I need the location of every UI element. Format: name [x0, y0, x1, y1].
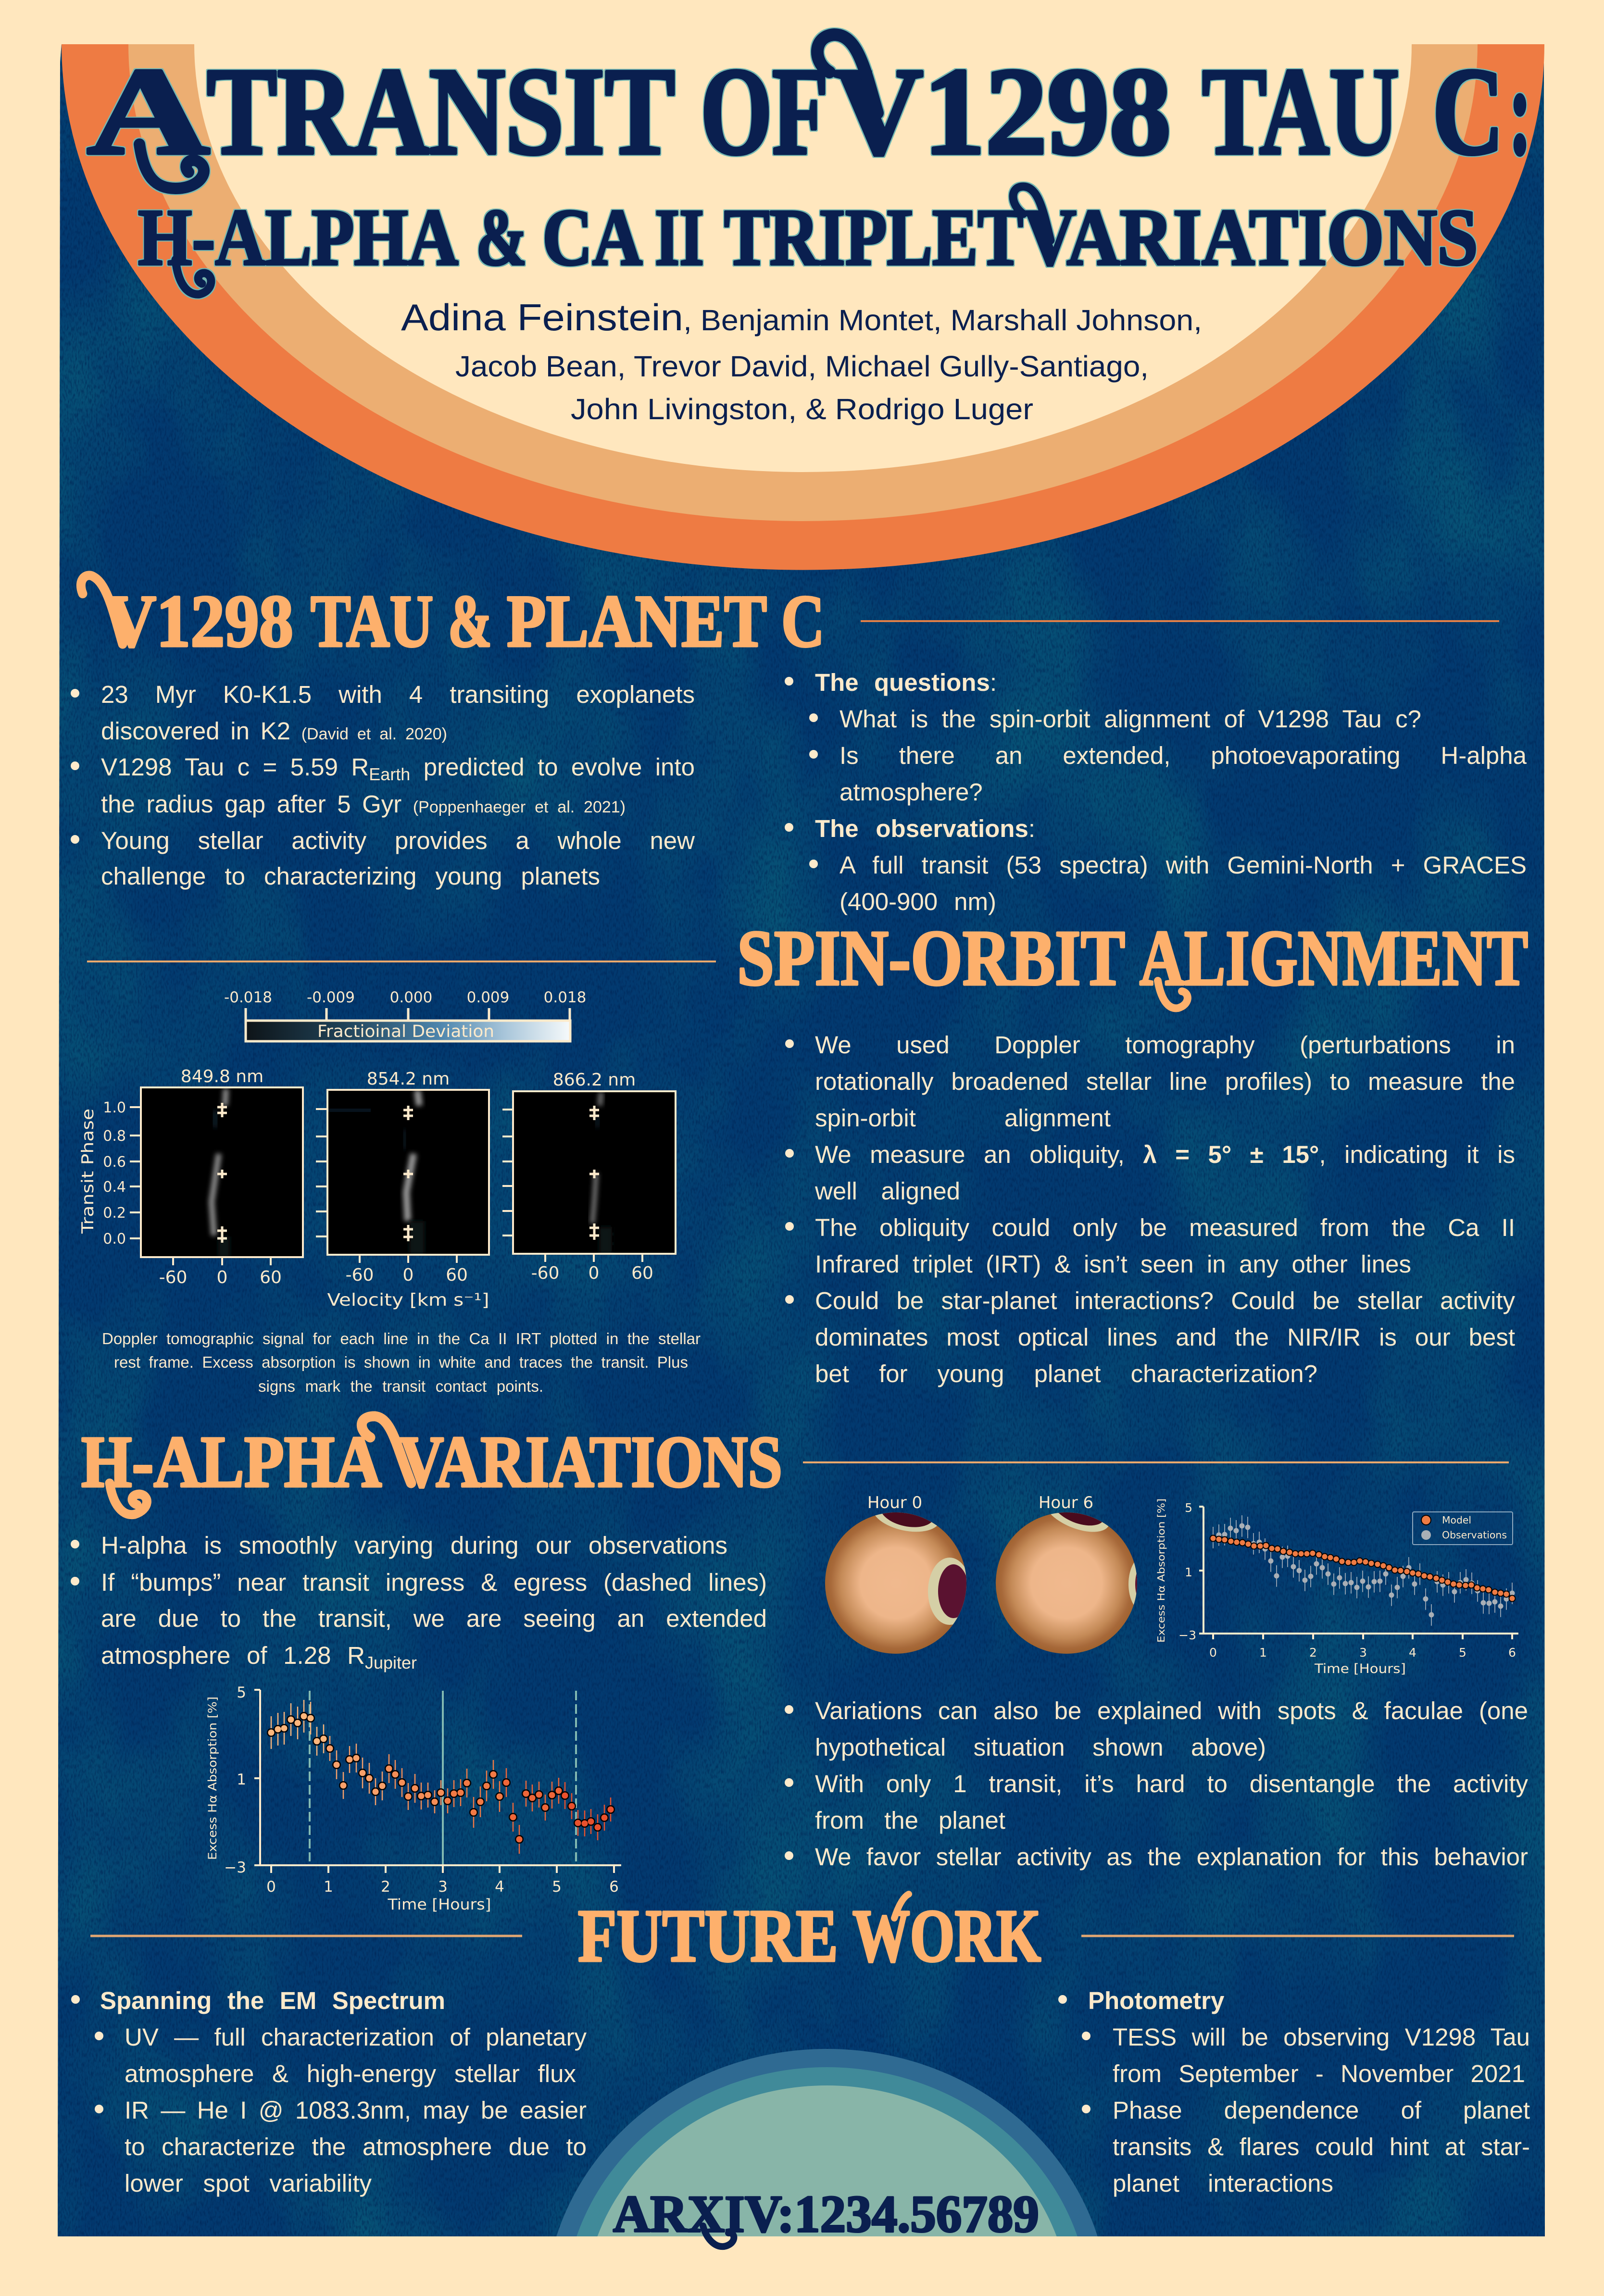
legend	[1413, 1512, 1513, 1545]
text block: spots and faculae bullets: With only 1 transit, it’s hard to disentangle the activity	[815, 1770, 1528, 1797]
heading: Future Work: WORK	[852, 1894, 1041, 1977]
heading: V1298 Tau & Planet C: C	[781, 580, 825, 662]
text block: spots and faculae bullets: from the planet	[815, 1807, 1005, 1834]
chart: excess H-alpha absorption: 5	[237, 1684, 246, 1701]
text block: spin-orbit bullets: spin-orbit alignment	[815, 1104, 1111, 1132]
star model: hour 0	[825, 1489, 971, 1654]
heading: H-alpha Variations	[81, 1416, 782, 1515]
heatmap: 849.8 nm: 849.8 nm	[181, 1067, 263, 1086]
text block: spots and faculae bullets: We favor stellar activity as the explanation for this behavior	[815, 1843, 1528, 1871]
divider: heading 1 rule	[861, 620, 1499, 622]
header arches	[62, 44, 1544, 570]
title line 2	[138, 187, 1478, 294]
heatmap: 854.2 nm: 0	[403, 1265, 414, 1285]
text block: questions and observations: The questions:	[815, 669, 997, 696]
text block: questions and observations: What is the spin-orbit alignment of V1298 Tau c?	[840, 705, 1421, 733]
text block: spanning the EM spectrum: IR — He I @ 1083.3nm, may be easier	[125, 2096, 587, 2124]
chart: colorbar: 0.018	[544, 989, 586, 1006]
chart: model vs observations: 3	[1359, 1646, 1367, 1660]
title line 2: H-ALPHA	[138, 193, 458, 282]
star model: hour 6: Hour 6	[1039, 1493, 1093, 1512]
text block: spin-orbit bullets: We measure an obliquity, λ = 5° ± 15°, indicating it is	[815, 1141, 1515, 1168]
chart: excess H-alpha absorption: Time [Hours]	[387, 1896, 491, 1913]
heading: V1298 Tau & Planet C: &	[448, 580, 492, 662]
heatmap: 849.8 nm: -60	[159, 1268, 187, 1287]
heatmap: 849.8 nm: 0.4	[103, 1179, 126, 1196]
text block: questions and observations: Is there an extended, photoevaporating H-alpha	[840, 742, 1527, 769]
heading: V1298 Tau & Planet C	[81, 575, 825, 662]
text block: photometry: transits & flares could hint at star-	[1113, 2133, 1530, 2160]
text block: H-alpha bullets: are due to the transit, we are seeing an extended	[101, 1605, 767, 1632]
text block: spots and faculae bullets	[785, 1693, 1528, 1875]
heatmap: 854.2 nm: -60	[346, 1265, 374, 1285]
star model: hour 6	[996, 1484, 1162, 1654]
title line 2: II	[655, 193, 704, 282]
text block: V1298 Tau bullets: the radius gap after 5 Gyr (Poppenhaeger et al. 2021)	[101, 790, 626, 818]
text block: spanning the EM spectrum: UV — full characterization of planetary	[125, 2023, 587, 2051]
heatmap: 849.8 nm: 0.6	[103, 1154, 126, 1171]
text block: V1298 Tau bullets	[71, 681, 695, 890]
caption: Doppler tomography: Doppler tomographic signal for each line in the Ca II IRT plotted in the stellar	[102, 1330, 701, 1348]
chart: excess H-alpha absorption: 5	[552, 1878, 562, 1896]
authors: , Benjamin Montet, Marshall Johnson,	[683, 304, 1202, 337]
heatmap: 849.8 nm: 60	[260, 1268, 282, 1287]
heatmap: 849.8 nm: 0.0	[103, 1231, 126, 1248]
axis label: transit phase: Transit Phase	[78, 1109, 98, 1234]
title	[87, 35, 1531, 294]
text block: V1298 Tau bullets: 23 Myr K0-K1.5 with 4 transiting exoplanets	[101, 681, 695, 708]
bottom teal arches	[556, 2049, 1098, 2236]
divider: heading 2 rule	[87, 961, 716, 962]
text block: V1298 Tau bullets: V1298 Tau c = 5.59 REarth predicted to evolve into	[101, 753, 695, 784]
text block: H-alpha bullets: H-alpha is smoothly varying during our observations	[101, 1532, 727, 1559]
authors: Adina Feinstein	[401, 296, 683, 338]
authors: Jacob Bean, Trevor David, Michael Gully-Santiago,	[455, 350, 1149, 383]
text block: spin-orbit bullets: Infrared triplet (IRT) & isn’t seen in any other lines	[815, 1250, 1411, 1278]
heading: Spin-Orbit Alignment: SPIN-ORBIT	[737, 914, 1125, 1002]
text block: spin-orbit bullets: dominates most optical lines and the NIR/IR is our best	[815, 1323, 1515, 1351]
chart: excess H-alpha absorption: 4	[495, 1878, 504, 1896]
title line 2: TRIPLET	[724, 193, 1023, 282]
heatmap: 854.2 nm: 854.2 nm	[367, 1069, 450, 1089]
text block: spin-orbit bullets: We used Doppler tomography (perturbations in	[815, 1031, 1515, 1059]
text block: H-alpha bullets: If “bumps” near transit ingress & egress (dashed lines)	[101, 1569, 767, 1596]
text block: photometry: from September - November 2021	[1113, 2060, 1525, 2087]
chart: model vs observations: 4	[1409, 1646, 1416, 1660]
text block: spin-orbit bullets: The obliquity could only be measured from the Ca II	[815, 1214, 1515, 1241]
divider: heading 3 rule	[803, 1461, 1509, 1463]
chart: excess H-alpha absorption: Excess Hα Absorption [%]	[206, 1697, 219, 1860]
chart: excess H-alpha absorption: 1	[324, 1878, 333, 1896]
text block: spin-orbit bullets: Could be star-planet interactions? Could be stellar activity	[815, 1287, 1515, 1314]
title line 2: &	[476, 193, 527, 282]
authors	[401, 296, 1202, 425]
title line 1: TRANSIT	[207, 42, 675, 181]
title line 1: A	[87, 42, 210, 181]
chart: excess H-alpha absorption: 2	[381, 1878, 390, 1896]
text block: H-alpha bullets: atmosphere of 1.28 RJupiter	[101, 1642, 417, 1672]
observations series	[1213, 1515, 1512, 1625]
text block: spanning the EM spectrum: Spanning the EM Spectrum	[100, 1987, 445, 2014]
heatmap: 849.8 nm: 1.0	[103, 1099, 126, 1116]
heatmap: 849.8 nm: 0.2	[103, 1205, 126, 1222]
chart: model vs observations: Excess Hα Absorption [%]	[1155, 1498, 1167, 1643]
chart: excess H-alpha absorption	[206, 1684, 621, 1913]
heading: V1298 Tau & Planet C: PLANET	[507, 580, 767, 662]
text block: spin-orbit bullets: rotationally broadened stellar line profiles) to measure the	[815, 1068, 1515, 1095]
text block: spin-orbit bullets	[785, 1031, 1515, 1387]
chart: colorbar: -0.009	[307, 989, 355, 1006]
title line 1: OF	[701, 42, 828, 181]
text block: H-alpha bullets	[71, 1527, 767, 1674]
text block: spanning the EM spectrum	[71, 1983, 587, 2202]
text block: V1298 Tau bullets: Young stellar activity provides a whole new	[101, 827, 695, 854]
caption: Doppler tomography: signs mark the transit contact points.	[258, 1377, 543, 1395]
axis label: velocity: Velocity [km s⁻¹]	[327, 1290, 489, 1310]
heatmap: 866.2 nm: 0	[589, 1263, 599, 1283]
title line 1: :	[1509, 42, 1531, 181]
chart: excess H-alpha absorption: 1	[237, 1771, 246, 1788]
heatmap: 854.2 nm: 60	[446, 1265, 468, 1285]
text block: photometry	[1058, 1983, 1530, 2202]
heading: H-alpha Variations: VARIATIONS	[399, 1422, 782, 1503]
heatmap: 866.2 nm: -60	[531, 1263, 559, 1283]
heatmap: 849.8 nm	[103, 1067, 303, 1287]
chart: colorbar	[224, 989, 586, 1041]
text block: photometry: Phase dependence of planet	[1113, 2096, 1530, 2124]
chart: model vs observations	[1155, 1498, 1518, 1676]
chart: model vs observations: Time [Hours]	[1314, 1661, 1406, 1676]
title line 1: C	[1432, 42, 1504, 181]
text block: questions and observations: atmosphere?	[840, 778, 983, 806]
text block: spin-orbit bullets: bet for young planet characterization?	[815, 1360, 1317, 1387]
chart: model vs observations: 1	[1185, 1565, 1192, 1579]
text block: photometry: planet interactions	[1113, 2170, 1333, 2197]
chart: Doppler tomography heatmaps	[78, 1067, 676, 1310]
chart: model vs observations: 5	[1459, 1646, 1466, 1660]
chart: model vs observations: 1	[1259, 1646, 1267, 1660]
text block: questions and observations	[785, 669, 1527, 915]
star model: hour 0: Hour 0	[867, 1493, 922, 1512]
chart: colorbar: Fractioinal Deviation	[317, 1022, 494, 1041]
title line 1	[87, 35, 1531, 188]
text block: questions and observations: The observations:	[815, 815, 1035, 842]
text block: questions and observations: (400-900 nm)	[840, 888, 996, 915]
legend: Model	[1442, 1514, 1471, 1526]
legend: Observations	[1442, 1529, 1507, 1541]
chart: excess H-alpha absorption: 0	[266, 1878, 276, 1896]
chart: model vs observations: 6	[1508, 1646, 1516, 1660]
data points with error bars	[271, 1700, 611, 1854]
chart: colorbar: -0.018	[224, 989, 272, 1006]
model series	[1213, 1538, 1512, 1598]
heatmap: 849.8 nm: 0	[217, 1268, 227, 1287]
heading: V1298 Tau & Planet C: TAU	[311, 580, 433, 662]
text block: spots and faculae bullets: hypothetical situation shown above)	[815, 1734, 1266, 1761]
heatmap: 866.2 nm: 866.2 nm	[553, 1070, 636, 1090]
chart: model vs observations: −3	[1178, 1628, 1196, 1642]
heading: Future Work	[578, 1894, 1041, 1977]
chart: colorbar: 0.009	[467, 989, 509, 1006]
chart: excess H-alpha absorption: 6	[609, 1878, 619, 1896]
title line 2: VARIATIONS	[1023, 193, 1478, 282]
heading: H-alpha Variations: H-ALPHA	[81, 1422, 382, 1503]
caption: Doppler tomography	[102, 1327, 701, 1399]
heatmap: 854.2 nm	[316, 1069, 489, 1285]
heatmap: 866.2 nm	[502, 1070, 676, 1283]
chart: model vs observations: 2	[1309, 1646, 1317, 1660]
text block: spots and faculae bullets: Variations can also be explained with spots & faculae (one	[815, 1697, 1528, 1724]
title line 2: CA	[542, 193, 642, 282]
caption: Doppler tomography: rest frame. Excess absorption is shown in white and traces the transit. Plus	[114, 1353, 688, 1371]
chart: colorbar: 0.000	[390, 989, 432, 1006]
authors: John Livingston, & Rodrigo Luger	[571, 393, 1033, 425]
divider: future work rules	[90, 1934, 1514, 1937]
text block: spin-orbit bullets: well aligned	[815, 1177, 960, 1205]
text block: photometry: Photometry	[1088, 1987, 1224, 2014]
heading: V1298 Tau & Planet C: V1298	[107, 580, 293, 662]
heading: Future Work: FUTURE	[578, 1894, 838, 1977]
text block: spanning the EM spectrum: to characterize the atmosphere due to	[125, 2133, 587, 2160]
chart: model vs observations: 0	[1209, 1646, 1217, 1660]
text block: spanning the EM spectrum: lower spot variability	[125, 2170, 372, 2197]
text block: questions and observations: A full transit (53 spectra) with Gemini-North + GRACES	[840, 851, 1527, 879]
title line 1: TAU	[1202, 42, 1399, 181]
heading: Spin-Orbit Alignment	[737, 914, 1528, 1008]
chart: excess H-alpha absorption: 3	[438, 1878, 448, 1896]
chart: excess H-alpha absorption: −3	[224, 1859, 246, 1876]
text block: spanning the EM spectrum: atmosphere & high-energy stellar flux	[125, 2060, 576, 2087]
text block: V1298 Tau bullets: challenge to characterizing young planets	[101, 862, 600, 890]
heatmap: 849.8 nm: 0.8	[103, 1128, 126, 1145]
arXiv identifier: ARXIV:1234.56789	[613, 2185, 1039, 2243]
heatmap: 866.2 nm: 60	[631, 1263, 653, 1283]
text block: photometry: TESS will be observing V1298 Tau	[1113, 2023, 1530, 2051]
chart: model vs observations: 5	[1185, 1501, 1192, 1515]
text block: V1298 Tau bullets: discovered in K2 (David et al. 2020)	[101, 717, 447, 745]
title line 1: V1298	[834, 42, 1171, 181]
